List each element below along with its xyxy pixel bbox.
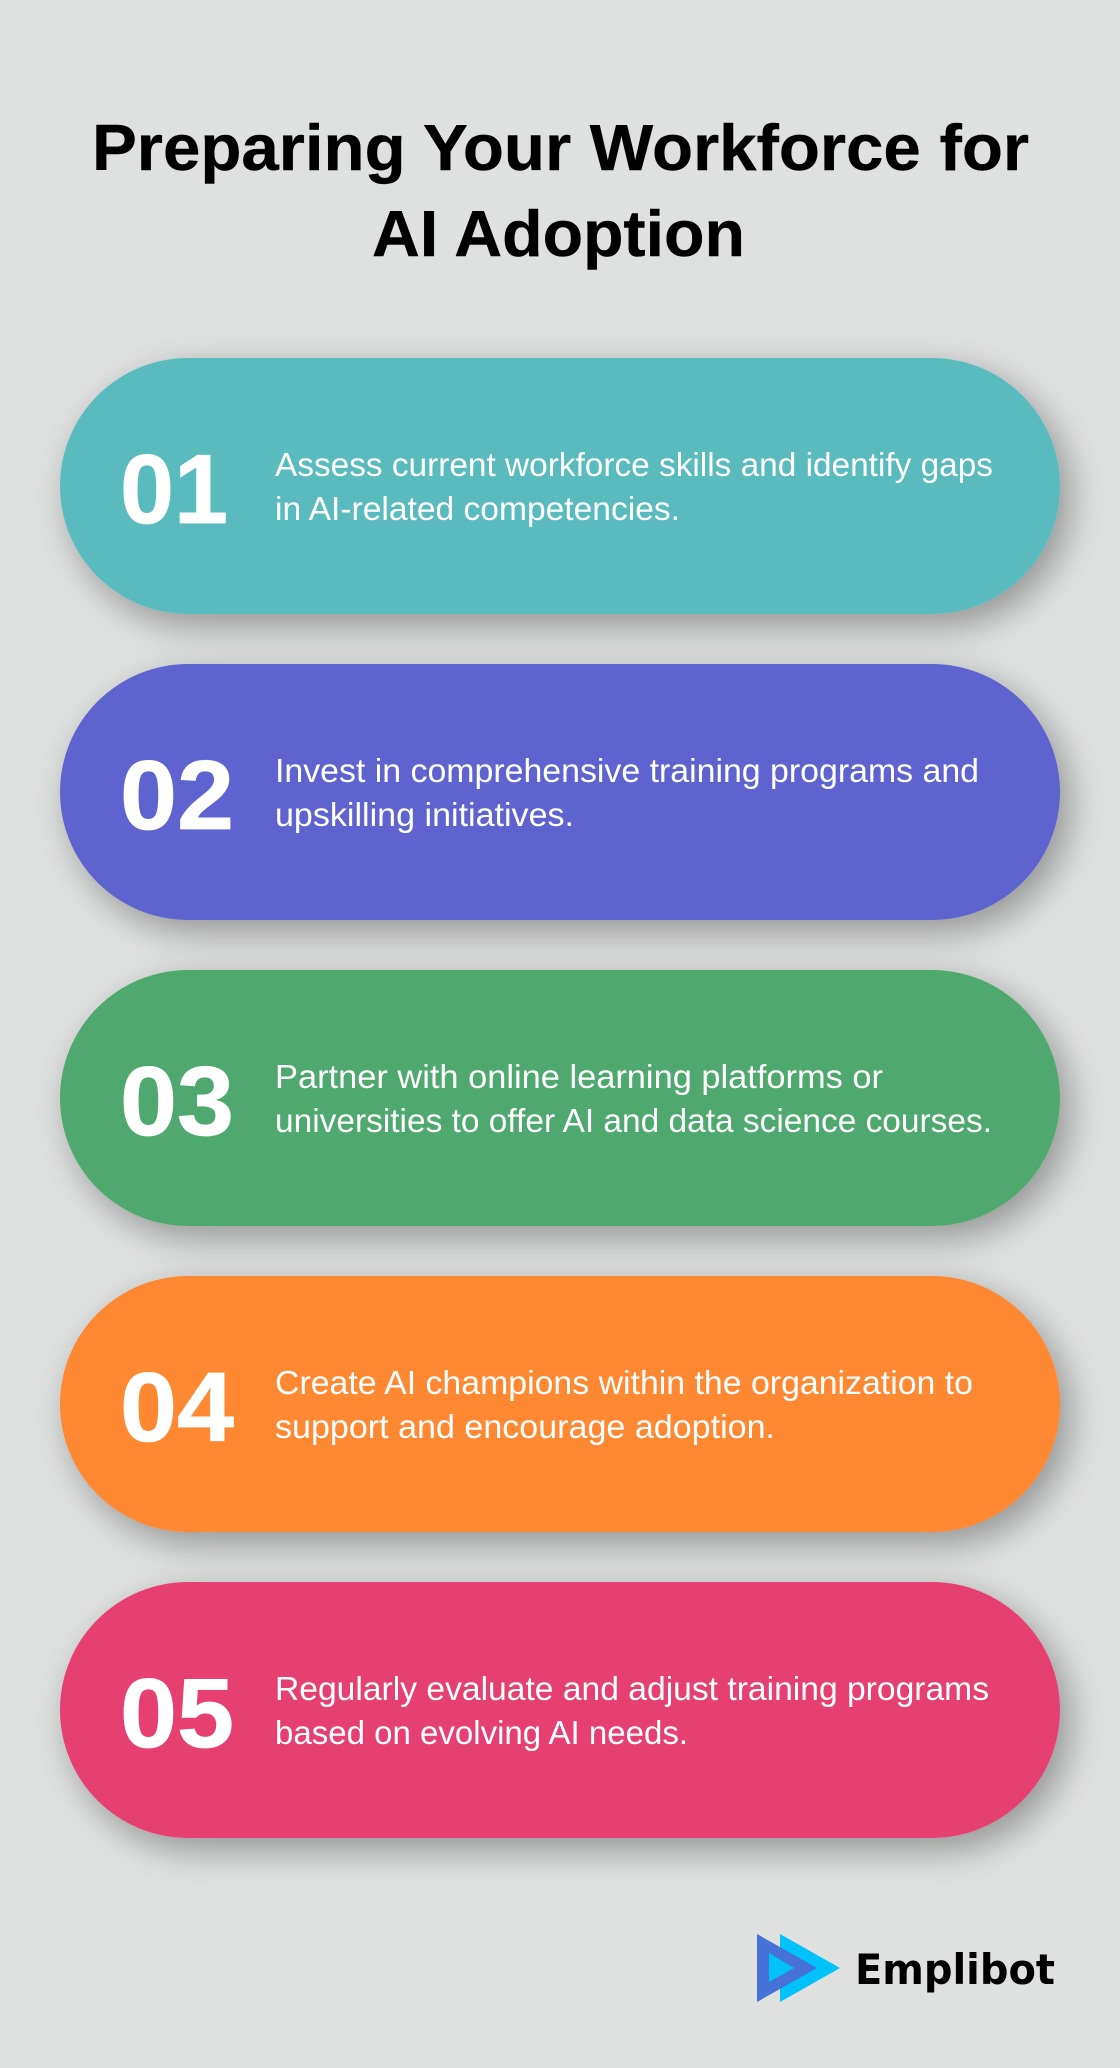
step text: Regularly evaluate and adjust training programs <box>275 1670 989 1707</box>
step text: upskilling initiatives. <box>275 796 574 833</box>
panel: step 02 <box>60 664 1060 920</box>
step text: Invest in comprehensive training programs and <box>275 752 979 789</box>
step number: 02 <box>120 740 234 850</box>
step text <box>275 1058 992 1139</box>
panel: step 03 <box>60 970 1060 1226</box>
step text: Create AI champions within the organization to <box>275 1364 973 1401</box>
step text: universities to offer AI and data science courses. <box>275 1102 992 1139</box>
pill background <box>60 1582 1060 1838</box>
title: AI Adoption <box>372 197 745 270</box>
step text <box>275 446 993 527</box>
step number: 01 <box>120 434 228 544</box>
step text: support and encourage adoption. <box>275 1408 775 1445</box>
step number: 04 <box>120 1352 234 1462</box>
pill background <box>60 358 1060 614</box>
pill background <box>60 1276 1060 1532</box>
pill background <box>60 664 1060 920</box>
title <box>92 111 1029 270</box>
step text <box>275 752 979 833</box>
title: Preparing Your Workforce for <box>92 111 1029 184</box>
wordmark: Emplibot <box>855 1945 1055 1994</box>
step text: based on evolving AI needs. <box>275 1714 688 1751</box>
icon: play triangles <box>757 1934 840 2002</box>
step text <box>275 1670 989 1751</box>
step text: in AI-related competencies. <box>275 490 680 527</box>
panel: step 05 <box>60 1582 1060 1838</box>
pill background <box>60 970 1060 1226</box>
step number: 05 <box>120 1658 234 1768</box>
panel: step 01 <box>60 358 1060 614</box>
step number: 03 <box>120 1046 234 1156</box>
step text: Partner with online learning platforms or <box>275 1058 883 1095</box>
step text <box>275 1364 973 1445</box>
logo: Emplibot <box>757 1934 1055 2002</box>
panel: step 04 <box>60 1276 1060 1532</box>
step text: Assess current workforce skills and identify gaps <box>275 446 993 483</box>
